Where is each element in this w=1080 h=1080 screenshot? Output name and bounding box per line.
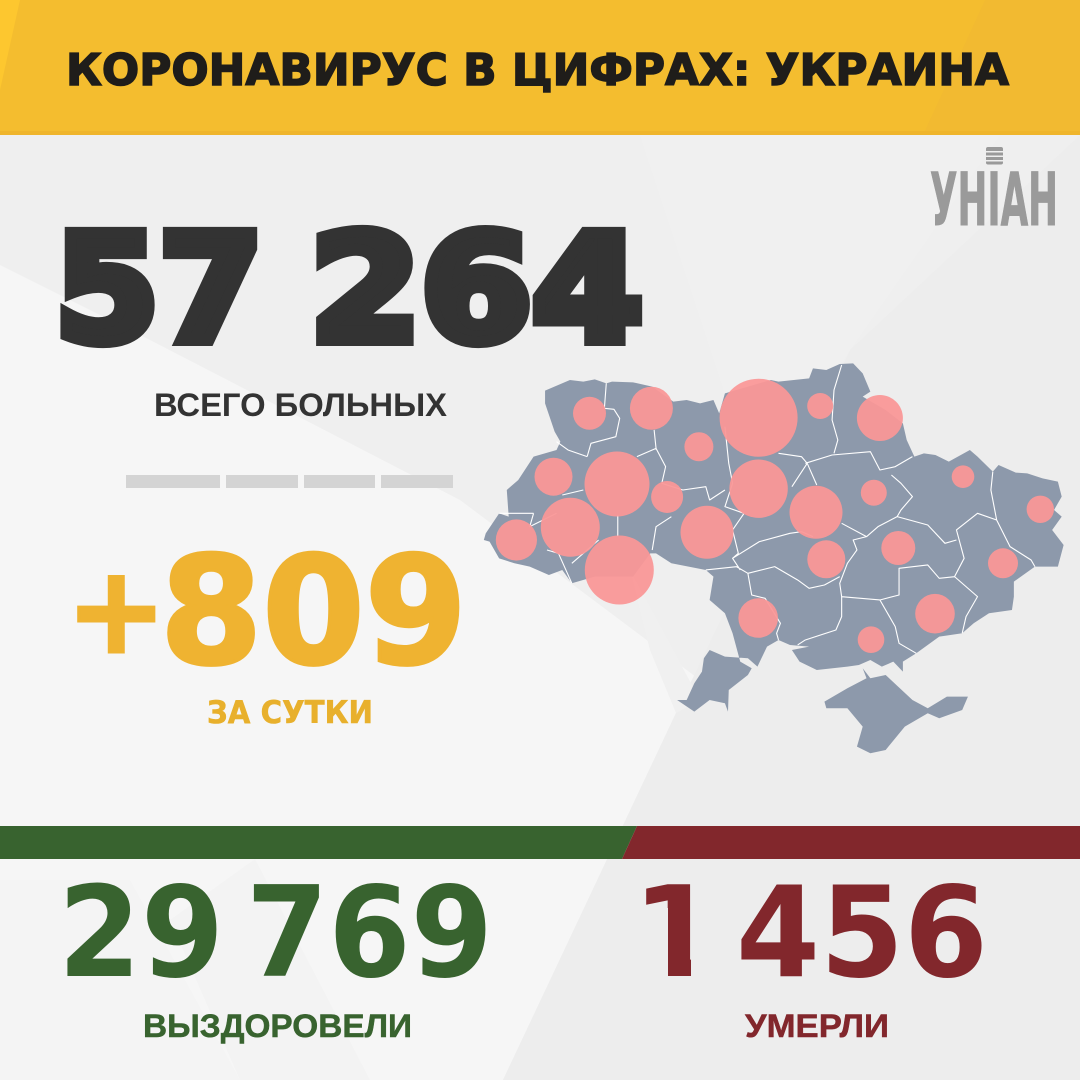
daily increase number: + <box>66 542 167 681</box>
recovered number: 769 <box>246 859 493 1006</box>
map: Crimea <box>824 668 968 753</box>
title: КОРОНАВИРУС В ЦИФРАХ: УКРАИНА <box>66 46 1009 96</box>
recovered number <box>58 859 493 1006</box>
recovered band <box>0 826 637 859</box>
recovered number: 29 <box>58 859 224 1006</box>
total cases label: ВСЕГО БОЛЬНЫХ <box>154 387 448 423</box>
deaths label: УМЕРЛИ <box>745 1008 889 1044</box>
deaths number: 1 <box>632 859 720 1006</box>
daily increase number: 809 <box>160 526 467 699</box>
deaths number: 456 <box>736 859 988 1006</box>
total cases number: 57 <box>55 204 263 375</box>
recovered label: ВЫЗДОРОВЕЛИ <box>143 1008 412 1044</box>
total cases number <box>55 204 643 375</box>
map: regions <box>484 363 1064 753</box>
separator bars <box>126 475 453 488</box>
map: case circles <box>496 379 1054 653</box>
total cases number: 264 <box>310 204 643 375</box>
map: region borders <box>499 365 1035 653</box>
deaths band <box>622 826 1080 859</box>
header banner <box>0 0 1080 135</box>
deaths number <box>646 883 982 978</box>
map of Ukraine with case circles <box>484 363 1064 753</box>
daily increase label: ЗА СУТКИ <box>207 695 373 731</box>
logo icon: microphone stripes <box>986 147 1003 164</box>
